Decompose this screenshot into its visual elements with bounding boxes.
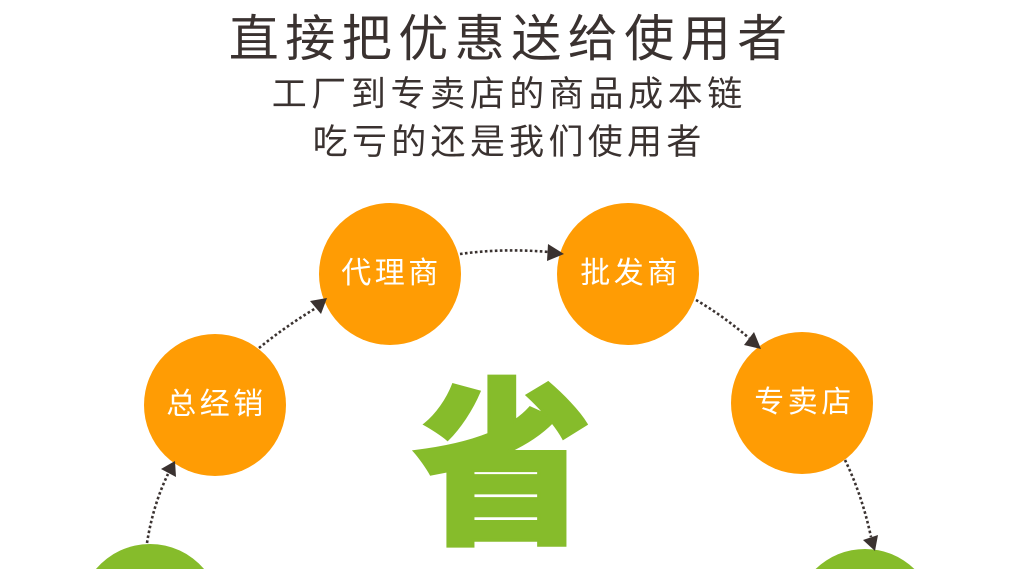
node: general distributor bbox=[144, 334, 286, 476]
subtitle line 1: 工厂到专卖店的商品成本链 bbox=[272, 75, 747, 114]
node: specialty store: 专卖店 bbox=[754, 386, 855, 419]
node: consumer (green, cropped) bbox=[816, 549, 914, 569]
large character: save: 省 bbox=[413, 367, 592, 567]
node: wholesaler bbox=[557, 203, 699, 345]
node: agent: 代理商 bbox=[341, 257, 442, 290]
node: factory (green, cropped) bbox=[96, 544, 204, 569]
title: 直接把优惠送给使用者 bbox=[229, 11, 794, 67]
node: general distributor: 总经销 bbox=[166, 388, 267, 421]
node: wholesaler: 批发商 bbox=[580, 257, 681, 290]
arrow: general distributor to agent bbox=[259, 298, 327, 348]
arrow: specialty store to consumer bbox=[845, 460, 878, 551]
arrow: wholesaler to specialty store bbox=[696, 300, 761, 349]
node: specialty store bbox=[731, 332, 873, 474]
node: agent bbox=[319, 203, 461, 345]
arrow: factory to general distributor bbox=[147, 461, 176, 543]
subtitle line 2: 吃亏的还是我们使用者 bbox=[313, 123, 706, 162]
arrow: agent to wholesaler bbox=[460, 244, 564, 261]
